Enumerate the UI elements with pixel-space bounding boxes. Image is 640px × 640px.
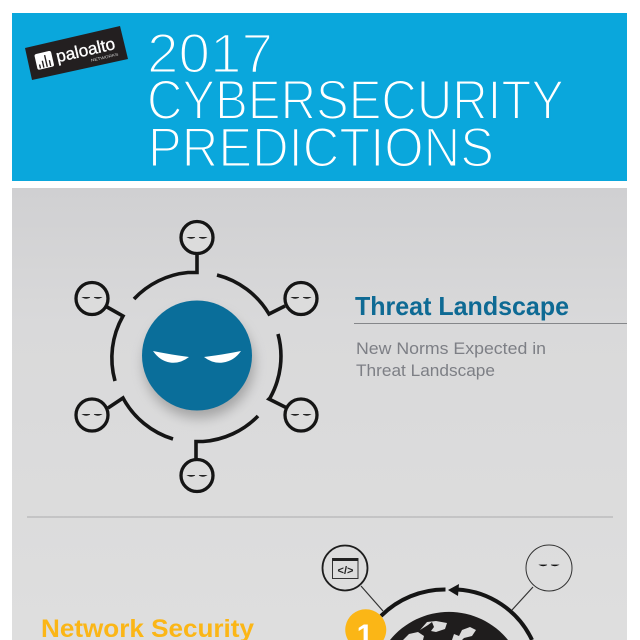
logo: Palo Alto Networks: NETWORKS: [90, 51, 119, 63]
subtitle text: Threat Landscape: [356, 361, 495, 380]
title: [147, 22, 564, 178]
number badge: [345, 609, 386, 640]
circular arrows: [381, 589, 532, 640]
connector ring segments: [107, 253, 287, 459]
arrow head: [448, 584, 459, 596]
connector lines: [361, 586, 533, 611]
icon: face: [526, 545, 572, 591]
grey background panel: [12, 188, 627, 640]
central face: [142, 300, 254, 418]
logo: Palo Alto Networks: paloalto: [54, 34, 117, 66]
heading rule: [354, 323, 627, 324]
title: PREDICTIONS: [148, 116, 494, 178]
icon: code window: </>: [338, 565, 353, 577]
node faces: [76, 222, 317, 492]
title: CYBERSECURITY: [147, 68, 564, 131]
logo: Palo Alto Networks: [25, 26, 128, 80]
heading: Threat Landscape: Threat Landscape: [355, 291, 569, 321]
globe: [390, 612, 508, 640]
icon: code window: [322, 546, 368, 590]
subtitle text: New Norms Expected in: [356, 339, 546, 358]
threat network diagram: [76, 222, 317, 492]
subtitle text: [356, 339, 546, 380]
network security diagram: [322, 545, 572, 640]
header banner: [12, 13, 627, 181]
title: 2017: [147, 22, 273, 84]
